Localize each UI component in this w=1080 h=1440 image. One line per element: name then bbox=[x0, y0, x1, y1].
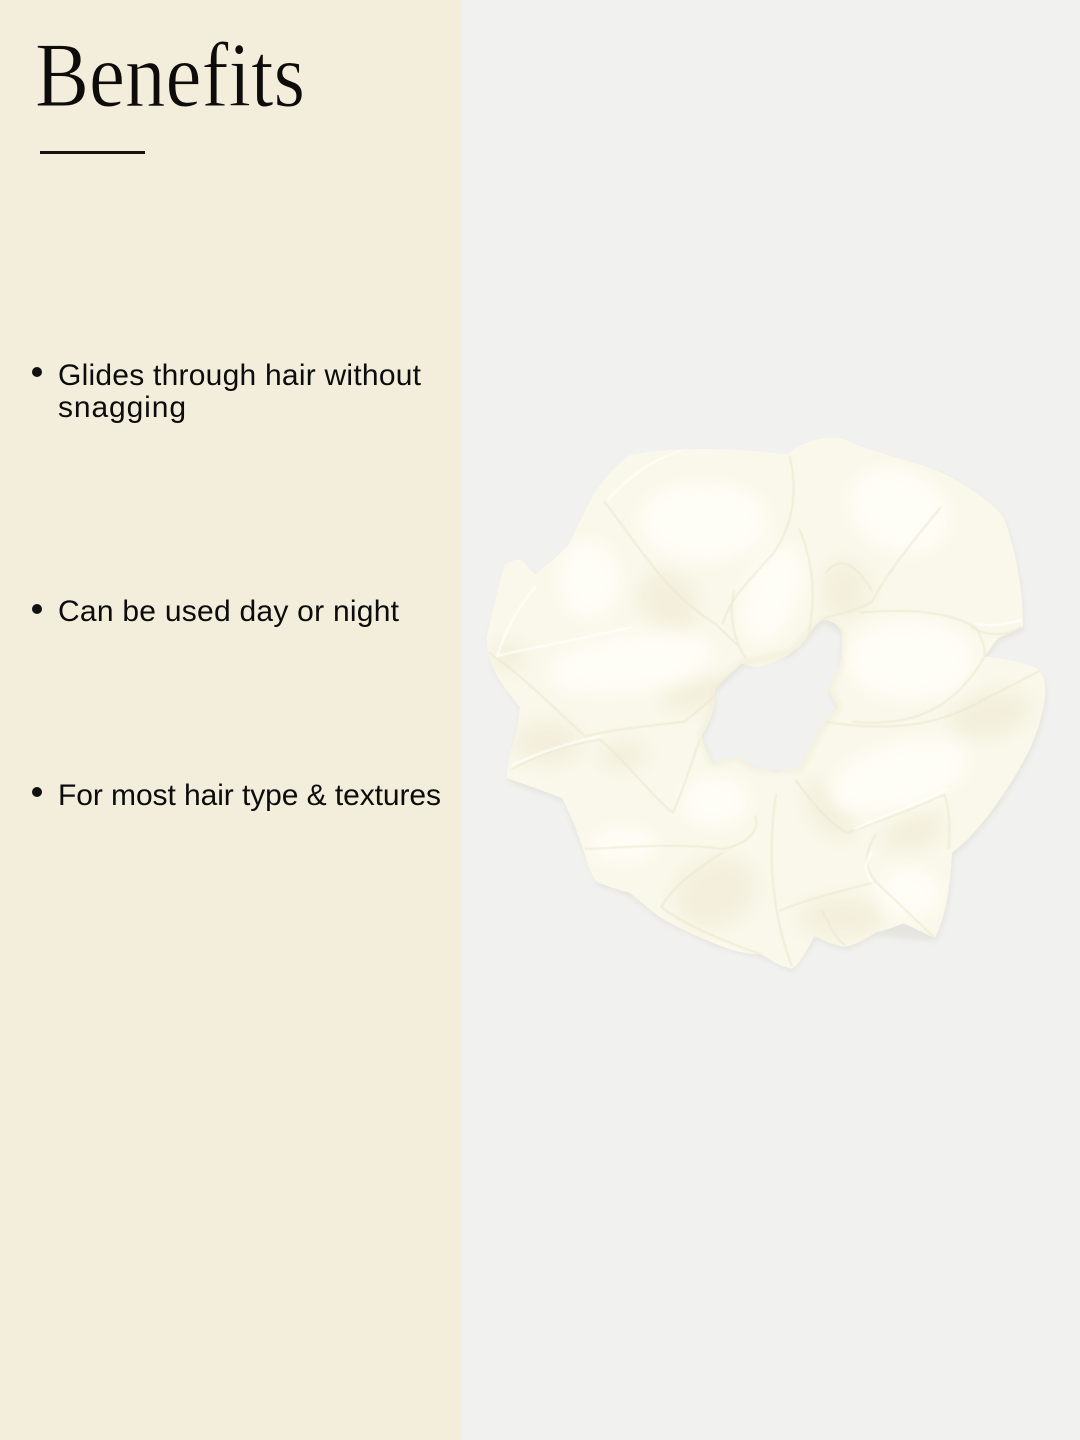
benefit item: glides through hair: snagging bbox=[58, 391, 186, 424]
benefit list bbox=[32, 359, 441, 812]
benefit item: hair types: For most hair type & textures bbox=[58, 779, 441, 812]
fabric highlights bbox=[543, 451, 978, 918]
hole edge shading bbox=[702, 620, 841, 769]
benefit item: glides through hair: Glides through hair without bbox=[58, 359, 422, 392]
title underline bbox=[40, 151, 145, 154]
title: Benefits bbox=[35, 24, 305, 126]
fabric shading bbox=[491, 561, 1037, 941]
fabric bright seam edges bbox=[497, 451, 1021, 889]
scrunchie soft shadow bbox=[488, 441, 1046, 973]
benefit item: day or night: Can be used day or night bbox=[58, 595, 400, 628]
background: right panel bbox=[461, 0, 1080, 1440]
scrunchie fabric bbox=[486, 438, 1045, 968]
benefit item: glides through hair bbox=[32, 359, 422, 424]
product illustration: satin scrunchie bbox=[486, 438, 1046, 970]
fabric fold lines bbox=[489, 456, 1040, 965]
panel: benefits sidebar bbox=[0, 0, 461, 1440]
